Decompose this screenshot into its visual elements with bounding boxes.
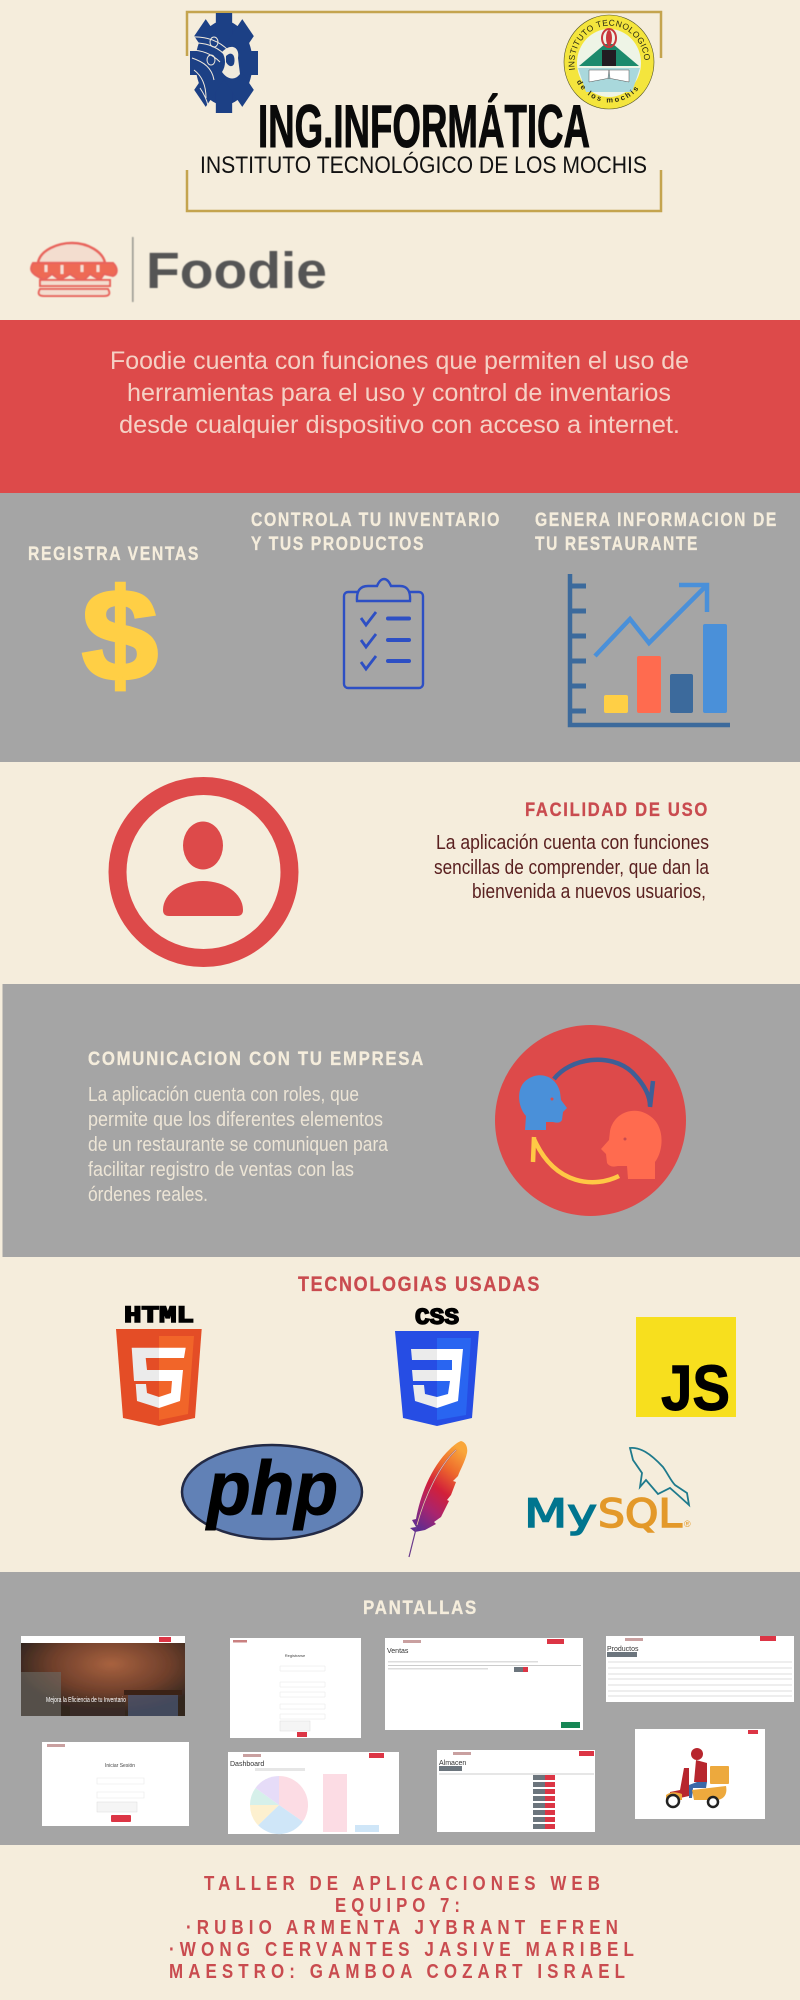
text: facilidad description: sencillas de comprender, que dan la <box>434 857 710 879</box>
text: comunicacion description: órdenes reales. <box>88 1184 208 1206</box>
text: comunicacion description: facilitar registro de ventas con las <box>88 1159 354 1181</box>
logo: institute seal: de los mochis <box>577 80 638 102</box>
logo: gear with eagle <box>190 13 258 113</box>
heading: genera informacion <box>535 509 778 555</box>
icon: two heads exchange <box>495 1025 686 1216</box>
icon: dollar sign: $ <box>82 562 158 708</box>
logo: MySQL: SQL <box>598 1492 682 1537</box>
text: comunicacion description: permite que los diferentes elementos <box>88 1109 383 1131</box>
heading: controla inventario <box>251 509 501 555</box>
panel: intro red band: herramientas para el uso y control de inventarios <box>127 379 671 407</box>
header frame <box>187 12 661 211</box>
heading: controla inventario: Y TUS PRODUCTOS <box>251 533 425 555</box>
text: comunicacion description: La aplicación cuenta con roles, que <box>88 1084 359 1106</box>
text: facilidad description: bienvenida a nuevos usuarios, <box>472 881 706 903</box>
text: footer credits: ·WONG CERVANTES JASIVE MARIBEL <box>169 1939 639 1961</box>
logo: JavaScript <box>636 1317 736 1424</box>
logo: Foodie burger and wordmark <box>31 237 327 302</box>
screenshot: productos <box>606 1636 794 1702</box>
text: comunicacion description <box>88 1084 389 1206</box>
heading: comunicacion: COMUNICACION CON TU EMPRESA <box>88 1048 425 1070</box>
logo: MySQL: My <box>524 1492 597 1537</box>
screenshot: ventas <box>385 1638 583 1730</box>
text: comunicacion description: de un restaurante se comuniquen para <box>88 1134 389 1156</box>
logo: CSS3: CSS <box>415 1305 459 1331</box>
screenshot: almacen <box>437 1750 595 1832</box>
heading: genera informacion: TU RESTAURANTE <box>535 533 699 555</box>
logo: institute seal <box>564 14 654 110</box>
screenshot: home page <box>21 1636 185 1716</box>
text: footer credits: MAESTRO: GAMBOA COZART ISRAEL <box>169 1961 630 1983</box>
screenshot: dashboard <box>228 1752 399 1834</box>
screenshot: home page: Mejora la Eficiencia de tu Inventario <box>46 1697 126 1704</box>
text: footer credits <box>169 1873 639 1983</box>
logo: PHP <box>182 1445 362 1539</box>
heading: facilidad de uso: FACILIDAD DE USO <box>525 799 709 821</box>
text: facilidad description: La aplicación cuenta con funciones <box>436 832 709 854</box>
heading: tecnologias usadas: TECNOLOGIAS USADAS <box>298 1273 541 1296</box>
panel: comunicacion <box>2 984 800 1257</box>
panel: pantallas <box>0 1572 800 1845</box>
logo: Apache feather <box>409 1441 467 1557</box>
logo: institute seal: INSTITUTO TECNOLOGICO <box>568 20 650 70</box>
logo: JavaScript: JS <box>661 1352 730 1424</box>
panel: intro red band <box>0 320 800 493</box>
screenshot: login <box>42 1742 189 1826</box>
logo: MySQL: ® <box>684 1519 691 1529</box>
heading: registra ventas: REGISTRA VENTAS <box>28 543 200 565</box>
screenshot: productos: Productos <box>607 1646 639 1653</box>
icon: user in circle <box>118 786 290 958</box>
heading: pantallas: PANTALLAS <box>363 1597 478 1619</box>
heading: controla inventario: CONTROLA TU INVENTARIO <box>251 509 501 531</box>
logo: CSS3 <box>395 1305 479 1426</box>
text: footer credits: EQUIPO 7: <box>335 1895 465 1917</box>
text: footer credits: TALLER DE APLICACIONES WEB <box>204 1873 605 1895</box>
icon: clipboard checklist <box>344 579 423 688</box>
title: ING.INFORMÁTICA <box>258 93 590 160</box>
text: footer credits: ·RUBIO ARMENTA JYBRANT EFREN <box>186 1917 623 1939</box>
screenshot: almacen: Almacen <box>439 1760 466 1767</box>
screenshot: dashboard: Dashboard <box>230 1761 264 1768</box>
panel: intro red band: Foodie cuenta con funciones que permiten el uso de <box>110 347 689 375</box>
icon: growth bar chart <box>570 574 730 725</box>
panel: features <box>0 493 800 762</box>
logo: Foodie burger and wordmark: Foodie <box>146 242 327 299</box>
text: facilidad description <box>434 832 710 903</box>
panel: intro red band: desde cualquier dispositivo con acceso a internet. <box>119 411 680 439</box>
screenshot: login: Iniciar Sesión <box>105 1763 135 1769</box>
logo: HTML5: HTML <box>124 1303 194 1329</box>
panel: facilidad de uso <box>118 786 710 958</box>
screenshot: delivery scooter <box>635 1729 765 1819</box>
subtitle: INSTITUTO TECNOLÓGICO DE LOS MOCHIS <box>200 152 647 179</box>
logo: PHP: php <box>205 1446 338 1531</box>
screenshot: register form <box>230 1638 361 1738</box>
logo: MySQL <box>524 1448 691 1537</box>
screenshot: register form: Registrarse <box>285 1653 306 1658</box>
logo: HTML5 <box>116 1303 202 1426</box>
screenshot: ventas: Ventas <box>387 1648 409 1655</box>
